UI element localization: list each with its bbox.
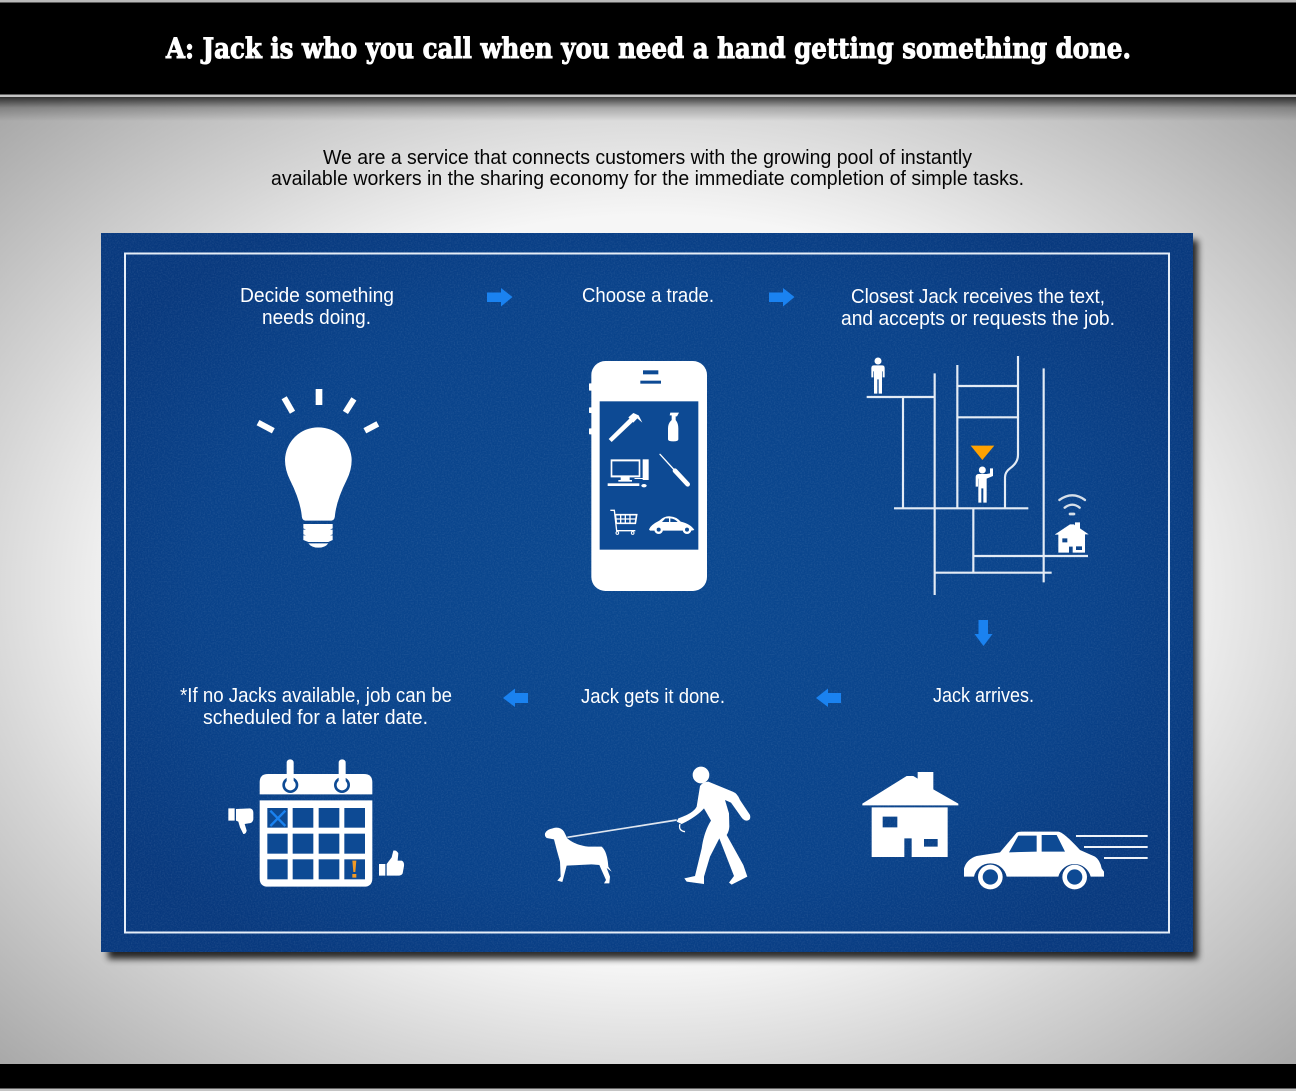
icon: hammer <box>609 413 642 442</box>
icon: smartphone with trades <box>589 361 707 591</box>
intro text: We are a service that connects customers with the growing pool of instantly <box>323 147 972 169</box>
step 4 text: Jack arrives. <box>933 685 1034 707</box>
scheduling note text: *If no Jacks available, job can be <box>180 685 452 707</box>
blueprint panel <box>101 233 1198 959</box>
step 3 text: Closest Jack receives the text, <box>851 286 1105 308</box>
step 2 text: Choose a trade. <box>582 285 714 307</box>
arrow: step 3 down to 4 <box>974 620 992 646</box>
icon: wifi signal <box>1059 495 1085 514</box>
icon: large house <box>862 772 958 857</box>
footer band <box>0 1064 1296 1091</box>
arrow: step 4 to 5 <box>816 688 841 707</box>
scheduling note text <box>180 685 452 729</box>
icon: house and moving car <box>862 772 1148 889</box>
icon: small house <box>1055 522 1089 553</box>
icon: waiting customer <box>871 357 885 394</box>
icon: computer <box>608 459 649 487</box>
header band <box>0 0 1296 121</box>
step 3 text: and accepts or requests the job. <box>841 308 1115 330</box>
blue cross <box>270 811 285 826</box>
icon: jack walking dog <box>545 767 750 885</box>
icon: speeding car <box>964 832 1148 889</box>
step 3 text <box>841 286 1115 330</box>
step 1 text: needs doing. <box>262 307 371 329</box>
arrow: step 2 to 3 <box>769 288 794 306</box>
step 1 text: Decide something <box>240 285 394 307</box>
arrow: step 1 to 2 <box>487 288 512 306</box>
icon: screwdriver <box>660 454 688 484</box>
step 1 text <box>240 285 394 329</box>
icon: thumb up <box>379 851 404 876</box>
icon: beetle car <box>649 516 694 534</box>
map roads <box>867 356 1088 595</box>
step 5 text: Jack gets it done. <box>581 686 725 708</box>
icon: jack waving <box>976 466 993 503</box>
icon: light bulb <box>257 389 379 548</box>
icon: calendar with thumbs <box>228 759 404 887</box>
scheduling note text: scheduled for a later date. <box>203 707 428 729</box>
intro text: available workers in the sharing economy for the immediate completion of simple tasks. <box>271 168 1024 190</box>
marker: orange triangle <box>971 446 994 460</box>
icon: spray bottle <box>668 413 679 441</box>
icon: shopping cart <box>610 510 637 534</box>
icon: thumb down <box>228 808 253 834</box>
title: A: Jack is who you call when you need a hand getting something done. <box>165 32 1131 65</box>
street map <box>867 356 1089 595</box>
orange exclamation mark <box>352 861 356 878</box>
arrow: step 5 to note <box>503 688 528 707</box>
intro text <box>271 147 1024 190</box>
